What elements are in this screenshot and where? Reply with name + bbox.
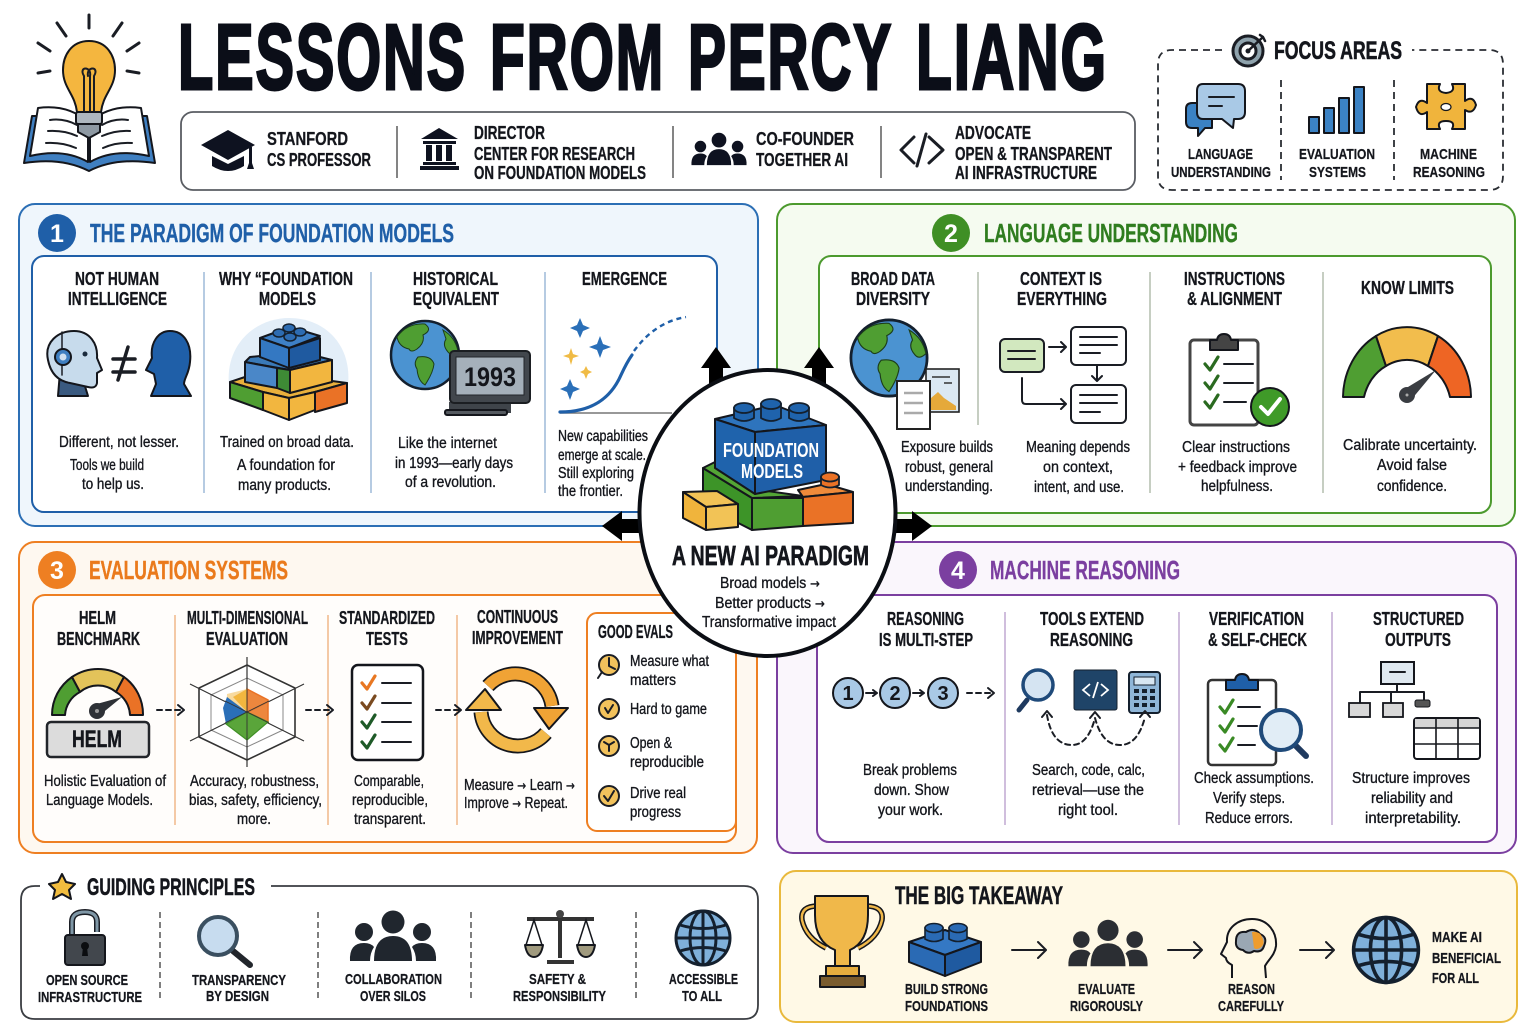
item: measure what matters: Measure what	[630, 653, 710, 670]
column: emergence: Still exploring	[558, 465, 634, 482]
badge: number 3: 3	[50, 557, 64, 585]
item: open and reproducible: reproducible	[630, 754, 704, 771]
column: not human intelligence: Tools we build	[70, 457, 144, 474]
heading: the big takeaway: THE BIG TAKEAWAY	[895, 882, 1063, 910]
column: tools extend reasoning: REASONING	[1050, 630, 1133, 650]
chart: emergence growth curve with stars	[560, 317, 686, 413]
column: continuous improvement: Measure → Learn →	[464, 777, 575, 794]
column: helm benchmark: Language Models.	[46, 792, 153, 809]
column: context is everything: CONTEXT IS	[1020, 269, 1102, 289]
icon: numbered steps: 1	[842, 683, 854, 705]
column: historical equivalent: HISTORICAL	[413, 269, 498, 289]
column: broad data diversity: Exposure builds	[901, 439, 993, 456]
column: continuous improvement: Improve → Repeat.	[464, 795, 568, 812]
column: know limits: Avoid false	[1377, 457, 1447, 474]
step: make AI beneficial for all: FOR ALL	[1432, 970, 1479, 987]
column: instructions and alignment: + feedback improve	[1178, 459, 1297, 476]
text: Stanford professor	[267, 129, 371, 170]
icon: improvement cycle arrows	[466, 674, 568, 746]
column: standardized tests: transparent.	[354, 811, 426, 828]
column: verification and self-check: Reduce errors.	[1205, 810, 1293, 827]
column: reasoning is multi-step: down. Show	[874, 782, 950, 799]
column: not human intelligence	[47, 269, 191, 493]
column: emergence: New capabilities	[558, 428, 648, 445]
text: Advocate role: ADVOCATE	[955, 123, 1031, 143]
panel 4: machine reasoning	[777, 542, 1516, 853]
column: structured outputs: Structure improves	[1352, 770, 1470, 787]
column: why foundation models: many products.	[238, 477, 331, 494]
column: helm benchmark: Holistic Evaluation of	[44, 773, 167, 790]
text: Co-founder role: TOGETHER AI	[756, 150, 848, 170]
icon: stacked blocks	[229, 318, 348, 420]
title: FROM	[490, 5, 665, 109]
step: evaluate rigorously: RIGOROUSLY	[1070, 998, 1143, 1015]
text: machine reasoning: REASONING	[1413, 164, 1485, 181]
column: structured outputs: reliability and	[1371, 790, 1453, 807]
column: not human intelligence: Different, not lesser.	[59, 434, 179, 451]
panel: guiding principles	[21, 874, 758, 1019]
text: Co-founder role: CO-FOUNDER	[756, 129, 854, 149]
icon: hierarchy and table	[1349, 662, 1480, 759]
arrow: multi-dimensional to tests	[306, 705, 333, 715]
column: not human intelligence: INTELLIGENCE	[68, 289, 167, 309]
column: instructions and alignment: helpfulness.	[1201, 478, 1273, 495]
icon: globe and 1993 monitor: 1993	[464, 362, 516, 392]
column: know limits: Calibrate uncertainty.	[1343, 437, 1477, 454]
column: reasoning is multi-step: REASONING	[887, 609, 964, 629]
icon: foundation model blocks	[683, 399, 853, 530]
column: reasoning is multi-step: IS MULTI-STEP	[879, 630, 973, 650]
column: tools extend reasoning: TOOLS EXTEND	[1040, 609, 1144, 629]
column: why foundation models: Trained on broad data.	[220, 434, 354, 451]
text: Director role: CENTER FOR RESEARCH	[474, 144, 635, 164]
icon: graduation cap	[201, 130, 255, 171]
column: structured outputs: STRUCTURED	[1373, 609, 1464, 629]
item: open and reproducible: Open &	[630, 735, 673, 752]
column: know limits: KNOW LIMITS	[1361, 278, 1454, 298]
icon: foundation model blocks: MODELS	[741, 461, 803, 483]
column: tools extend reasoning: Search, code, calc,	[1032, 762, 1145, 779]
column: context is everything: intent, and use.	[1034, 479, 1124, 496]
arrow: helm to multi-dimensional	[157, 705, 184, 715]
principle: collaboration over silos: OVER SILOS	[360, 988, 426, 1005]
principle: safety and responsibility: SAFETY &	[529, 971, 586, 988]
column: emergence: EMERGENCE	[582, 269, 667, 289]
column: standardized tests	[339, 608, 435, 828]
text: paradigm outcomes: Better products →	[715, 595, 825, 612]
title	[178, 5, 1108, 109]
column: continuous improvement: IMPROVEMENT	[472, 628, 563, 648]
column: instructions and alignment: INSTRUCTIONS	[1184, 269, 1285, 289]
column: context is everything: on context,	[1043, 459, 1113, 476]
panel: good evals	[587, 613, 736, 831]
column: broad data diversity	[851, 269, 993, 495]
step: build strong foundations: BUILD STRONG	[905, 981, 988, 998]
icon: context flow diagram	[1000, 327, 1126, 423]
panel 2: language understanding	[777, 204, 1515, 526]
column: multi-dimensional evaluation: MULTI-DIMENSIONAL	[187, 608, 308, 628]
column: context is everything: EVERYTHING	[1017, 289, 1107, 309]
principle: accessible to all	[669, 911, 738, 1005]
column: emergence	[558, 269, 686, 500]
icon: star	[49, 874, 75, 899]
panel: the big takeaway	[780, 871, 1517, 1022]
column: emergence: the frontier.	[558, 483, 623, 500]
column: tools extend reasoning: retrieval—use the	[1032, 782, 1144, 799]
panel 1: the paradigm of foundation models	[19, 204, 758, 526]
principle: open source infrastructure: OPEN SOURCE	[46, 972, 128, 989]
column: broad data diversity: understanding.	[905, 478, 993, 495]
item: open and reproducible	[599, 735, 704, 771]
panel: biography bar	[181, 112, 1135, 190]
column: reasoning is multi-step: your work.	[878, 802, 943, 819]
icon: bar chart	[1309, 87, 1364, 133]
column: why foundation models: A foundation for	[237, 457, 335, 474]
column: why foundation models	[219, 269, 354, 494]
column: why foundation models: WHY “FOUNDATION	[219, 269, 353, 289]
principle: collaboration over silos: COLLABORATION	[345, 971, 442, 988]
step: make AI beneficial for all: BENEFICIAL	[1432, 950, 1501, 967]
column: tools extend reasoning	[1019, 609, 1160, 819]
column: reasoning is multi-step: Break problems	[863, 762, 957, 779]
icon: numbered steps: 3	[937, 683, 949, 705]
text: Director role: ON FOUNDATION MODELS	[474, 163, 646, 183]
icon: light bulb over open book	[24, 15, 155, 171]
column: multi-dimensional evaluation: more.	[237, 811, 271, 828]
column: multi-dimensional evaluation: bias, safety, efficiency,	[189, 792, 322, 809]
column: instructions and alignment: Clear instructions	[1182, 439, 1290, 456]
column: historical equivalent: of a revolution.	[405, 474, 496, 491]
column: helm benchmark	[44, 608, 167, 809]
badge: number 2	[932, 214, 970, 252]
principle: accessible to all: TO ALL	[682, 988, 722, 1005]
arrows: out of centre hub	[602, 347, 932, 541]
icon: institution building	[420, 128, 459, 170]
icon: puzzle piece	[1416, 84, 1476, 129]
text: paradigm outcomes: Transformative impact	[702, 614, 837, 631]
column: broad data diversity: DIVERSITY	[856, 289, 930, 309]
text: Stanford professor: STANFORD	[267, 129, 348, 149]
text: machine reasoning	[1413, 146, 1485, 181]
heading: guiding principles: GUIDING PRINCIPLES	[87, 874, 255, 901]
principle: safety and responsibility: RESPONSIBILITY	[513, 988, 606, 1005]
principle: transparency by design: BY DESIGN	[206, 988, 269, 1005]
principle: safety and responsibility	[513, 910, 606, 1005]
title: LESSONS	[178, 5, 467, 109]
column: verification and self-check: VERIFICATION	[1209, 609, 1304, 629]
column: tools extend reasoning: right tool.	[1058, 802, 1118, 819]
text: Advocate role	[955, 123, 1112, 183]
arrow: build to evaluate	[1012, 942, 1046, 958]
item: drive real progress	[599, 785, 686, 821]
column: multi-dimensional evaluation	[187, 608, 322, 828]
icon: target	[1233, 35, 1265, 66]
text: evaluation systems: SYSTEMS	[1309, 164, 1366, 181]
icon: helm gauge	[47, 669, 149, 757]
icon: trophy	[802, 896, 882, 987]
column: not human intelligence: NOT HUMAN	[75, 269, 159, 289]
column: instructions and alignment	[1178, 269, 1297, 495]
step: make AI beneficial for all: MAKE AI	[1432, 929, 1482, 946]
item: hard to game: Hard to game	[630, 701, 707, 718]
column: verification and self-check: Check assumptions.	[1194, 770, 1314, 787]
principle: transparency by design	[192, 917, 286, 1005]
column: broad data diversity: BROAD DATA	[851, 269, 935, 289]
heading: panel 1: THE PARADIGM OF FOUNDATION MODELS	[90, 218, 454, 248]
column: context is everything	[1000, 269, 1130, 496]
column: helm benchmark: HELM	[79, 608, 116, 628]
panel 3: evaluation systems	[19, 542, 757, 853]
column: standardized tests: reproducible,	[352, 792, 428, 809]
column: structured outputs	[1349, 609, 1480, 827]
column: helm benchmark: BENCHMARK	[57, 629, 140, 649]
icon: speech bubbles	[1186, 84, 1245, 136]
item: measure what matters: matters	[630, 672, 676, 689]
heading: focus areas: FOCUS AREAS	[1274, 37, 1402, 65]
column: continuous improvement	[464, 607, 575, 812]
chart: radar hexagon	[190, 657, 304, 767]
step: reason carefully	[1218, 919, 1284, 1015]
icon: foundation model blocks: FOUNDATION	[723, 440, 819, 462]
icon: checklist	[352, 665, 423, 760]
text: evaluation systems: EVALUATION	[1299, 146, 1375, 163]
column: know limits: confidence.	[1377, 478, 1447, 495]
step: reason carefully: CAREFULLY	[1218, 998, 1284, 1015]
step: reason carefully: REASON	[1228, 981, 1275, 998]
column: structured outputs: OUTPUTS	[1385, 630, 1451, 650]
icon: clipboard with magnifier	[1208, 674, 1306, 765]
badge: number 1: 1	[50, 220, 64, 248]
title: PERCY	[688, 5, 893, 109]
badge: number 1	[38, 214, 76, 252]
column: standardized tests: Comparable,	[354, 773, 424, 790]
icon: search, code and calculator tools	[1019, 670, 1160, 745]
badge: number 4: 4	[951, 557, 965, 585]
icon: code brackets	[901, 134, 943, 166]
column: standardized tests: STANDARDIZED	[339, 608, 435, 628]
text: language understanding: UNDERSTANDING	[1171, 164, 1271, 181]
column: broad data diversity: robust, general	[905, 459, 993, 476]
icon: globe with documents	[851, 320, 959, 429]
heading: panel 4: MACHINE REASONING	[990, 555, 1180, 585]
badge: number 2: 2	[944, 220, 958, 248]
item: measure what matters	[598, 653, 710, 689]
arrow: reason to benefit	[1300, 942, 1334, 958]
text: paradigm outcomes	[702, 575, 837, 631]
text: paradigm outcomes: Broad models →	[720, 575, 820, 592]
heading: panel 3: EVALUATION SYSTEMS	[89, 555, 288, 585]
column: multi-dimensional evaluation: EVALUATION	[206, 629, 288, 649]
column: historical equivalent: EQUIVALENT	[413, 289, 499, 309]
column: why foundation models: MODELS	[259, 289, 316, 309]
column: historical equivalent: Like the internet	[398, 435, 498, 452]
badge: number 3	[38, 551, 76, 589]
text: Co-founder role	[756, 129, 854, 170]
principle: accessible to all: ACCESSIBLE	[669, 971, 738, 988]
column: instructions and alignment: & ALIGNMENT	[1187, 289, 1282, 309]
icon: uncertainty gauge	[1343, 327, 1471, 403]
column: context is everything: Meaning depends	[1026, 439, 1130, 456]
column: know limits	[1343, 278, 1477, 495]
arrow: evaluate to reason	[1168, 942, 1202, 958]
column: verification and self-check: & SELF-CHECK	[1208, 630, 1307, 650]
icon: numbered steps: 2	[889, 683, 901, 705]
step: build strong foundations	[905, 924, 988, 1015]
step: evaluate rigorously	[1068, 920, 1148, 1015]
icon: numbered steps	[833, 678, 994, 708]
heading: a new AI paradigm: A NEW AI PARADIGM	[672, 540, 869, 571]
column: standardized tests: TESTS	[366, 629, 408, 649]
heading: panel 2: LANGUAGE UNDERSTANDING	[984, 218, 1238, 248]
text: Director role	[474, 123, 646, 183]
icon: team people	[691, 133, 747, 165]
column: structured outputs: interpretability.	[1365, 810, 1461, 827]
column: verification and self-check: Verify steps.	[1213, 790, 1285, 807]
column: multi-dimensional evaluation: Accuracy, robustness,	[190, 773, 319, 790]
icon: clipboard with green check	[1190, 334, 1289, 426]
text: Advocate role: OPEN & TRANSPARENT	[955, 144, 1112, 164]
item: drive real progress: progress	[630, 804, 681, 821]
column: verification and self-check	[1194, 609, 1314, 827]
heading: good evals: GOOD EVALS	[598, 622, 673, 642]
step: evaluate rigorously: EVALUATE	[1078, 981, 1135, 998]
column: not human intelligence: to help us.	[82, 476, 144, 493]
text: evaluation systems	[1299, 146, 1375, 181]
arrow: tests to improvement	[436, 705, 461, 715]
column: emergence: emerge at scale.	[558, 447, 646, 464]
panel: focus areas	[1158, 35, 1503, 190]
principle: open source infrastructure: INFRASTRUCTURE	[38, 989, 142, 1006]
step: build strong foundations: FOUNDATIONS	[905, 998, 988, 1015]
badge: number 4	[939, 551, 977, 589]
principle: collaboration over silos	[345, 910, 442, 1005]
step: make AI beneficial for all	[1354, 918, 1501, 987]
principle: open source infrastructure	[38, 912, 142, 1006]
item: drive real progress: Drive real	[630, 785, 686, 802]
text: Stanford professor: CS PROFESSOR	[267, 150, 371, 170]
column: historical equivalent: in 1993—early days	[395, 455, 513, 472]
column: historical equivalent	[391, 269, 530, 491]
item: hard to game	[599, 699, 707, 719]
panel: centre hub, a new AI paradigm	[640, 370, 896, 656]
icon: helm gauge: HELM	[72, 726, 122, 753]
column: reasoning is multi-step	[833, 609, 994, 819]
text: Director role: DIRECTOR	[474, 123, 545, 143]
principle: transparency by design: TRANSPARENCY	[192, 972, 286, 989]
icon: globe and 1993 monitor	[391, 321, 530, 415]
title: LIANG	[916, 5, 1108, 109]
text: machine reasoning: MACHINE	[1420, 146, 1477, 163]
column: continuous improvement: CONTINUOUS	[477, 607, 558, 627]
icon: robot head not equal to human head	[47, 331, 191, 396]
text: Advocate role: AI INFRASTRUCTURE	[955, 163, 1097, 183]
text: language understanding	[1171, 146, 1271, 181]
text: language understanding: LANGUAGE	[1188, 146, 1253, 163]
